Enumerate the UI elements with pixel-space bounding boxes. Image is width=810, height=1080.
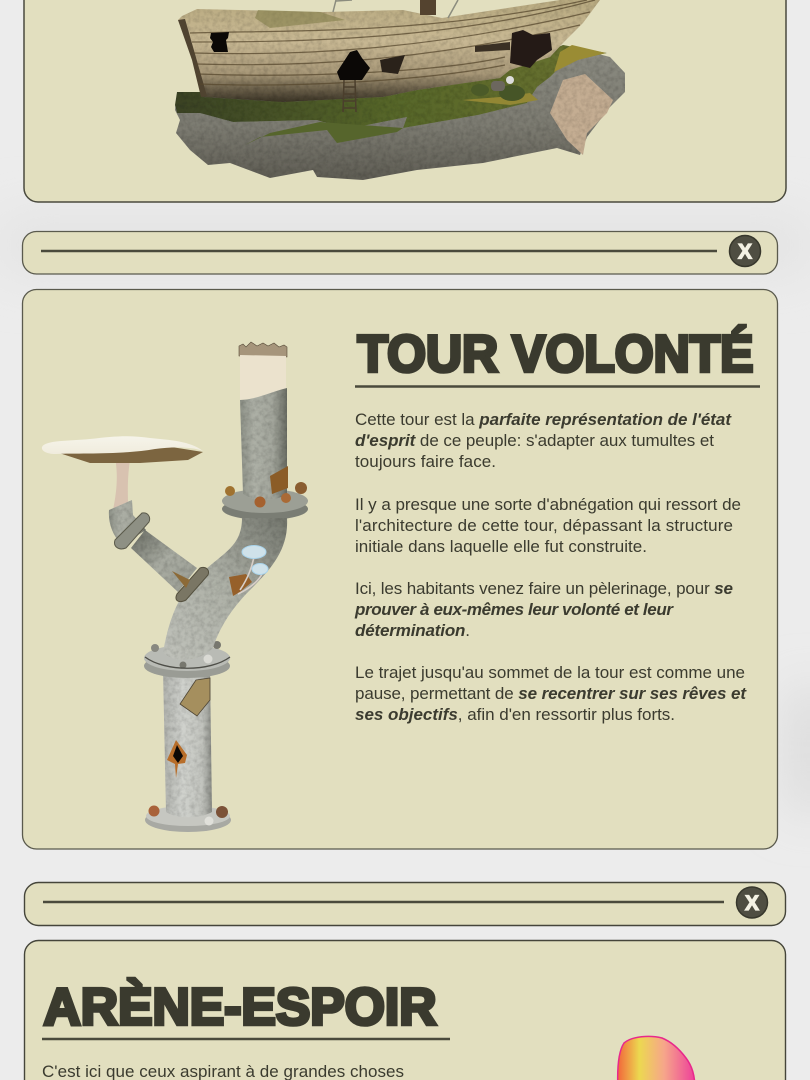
stone cylinder xyxy=(240,355,286,400)
lower flange bolts xyxy=(145,654,230,668)
moss patch xyxy=(462,93,538,105)
panel: Arène-Espoir xyxy=(24,940,786,1080)
flange bolts xyxy=(225,482,307,508)
upper pipe xyxy=(240,388,287,500)
grass strip on rock xyxy=(245,122,403,145)
small flange xyxy=(115,513,150,549)
panel: ship illustration xyxy=(24,0,786,202)
crown xyxy=(239,342,287,357)
rust patch lower xyxy=(180,678,210,716)
side branch pipe xyxy=(131,530,197,592)
rust on branch xyxy=(172,571,190,588)
panel: Tour Volonté xyxy=(22,290,778,849)
hull xyxy=(178,0,600,102)
text block: paragraph 3: Ici, les habitants venez faire un pèlerinage, pour se xyxy=(355,579,733,598)
divider bar 1 xyxy=(22,232,778,274)
branch flange xyxy=(176,567,209,602)
divider bar 2 xyxy=(24,882,786,926)
text block: paragraph 3: détermination. xyxy=(355,621,470,640)
text block: paragraph 3 xyxy=(354,579,733,640)
text block: paragraph 4: pause, permettant de se recentrer sur ses rêves et xyxy=(355,684,747,703)
elbow xyxy=(109,500,146,545)
text block: paragraph 2: Il y a presque une sorte d'abnégation qui ressort de xyxy=(355,495,741,514)
text block: paragraph 1: Cette tour est la parfaite représentation de l'état xyxy=(355,410,732,429)
grass xyxy=(175,45,607,128)
rigging and flag xyxy=(333,0,458,18)
mushroom cap xyxy=(42,436,203,463)
hull planks xyxy=(190,0,595,85)
main bend xyxy=(163,518,287,660)
heading: Arène-Espoir: ARÈNE-ESPOIR xyxy=(44,978,436,1036)
text block: paragraph 4: ses objectifs, afin d'en ressortir plus forts. xyxy=(355,705,675,724)
text block: paragraph 4 xyxy=(355,663,747,724)
close button: X xyxy=(745,892,759,915)
moss tint on deck xyxy=(255,10,345,28)
island rock xyxy=(175,45,625,180)
illustration: pipe tower with mushrooms xyxy=(42,342,308,832)
text block: paragraph 2: initiale dans laquelle elle fut construite. xyxy=(355,537,647,556)
text block: paragraph 2 xyxy=(355,495,741,556)
text block: paragraph 2: l'architecture de cette tour, dépassant la structure xyxy=(355,516,733,535)
close button xyxy=(730,236,760,266)
text block: paragraph 1 xyxy=(355,410,732,471)
small blue mushrooms xyxy=(238,546,268,594)
illustration: wrecked ship on a floating island xyxy=(175,0,625,180)
mushroom stem xyxy=(113,460,130,510)
rust patch on upper pipe xyxy=(270,466,288,494)
close button xyxy=(736,887,768,918)
heading underline xyxy=(355,385,760,388)
base bolt xyxy=(204,816,214,826)
mast xyxy=(420,0,436,15)
text block: paragraph 1: toujours faire face. xyxy=(355,452,496,471)
upper flange xyxy=(222,489,308,520)
heading underline xyxy=(42,1038,450,1040)
illustration: flower petal xyxy=(618,1036,695,1080)
lit rock face xyxy=(550,74,613,155)
yellow moss xyxy=(554,45,606,72)
pipe hole xyxy=(167,740,187,778)
lower pipe xyxy=(163,670,212,817)
close button: X xyxy=(738,240,752,264)
hull holes xyxy=(210,30,552,80)
base flange xyxy=(145,806,231,832)
heading: Tour Volonté: TOUR VOLONTÉ xyxy=(358,326,754,384)
text block: paragraph 4: Le trajet jusqu'au sommet de la tour est comme une xyxy=(355,663,745,682)
sheep and bush xyxy=(471,76,525,101)
hull stem post xyxy=(178,19,207,97)
text block: paragraph 3: prouver à eux-mêmes leur volonté et leur xyxy=(354,600,674,619)
ladder xyxy=(343,80,356,112)
lower flange xyxy=(144,641,230,678)
text block: paragraph 1: d'esprit de ce peuple: s'adapter aux tumultes et xyxy=(355,431,714,450)
rust patch on bend xyxy=(229,574,252,596)
